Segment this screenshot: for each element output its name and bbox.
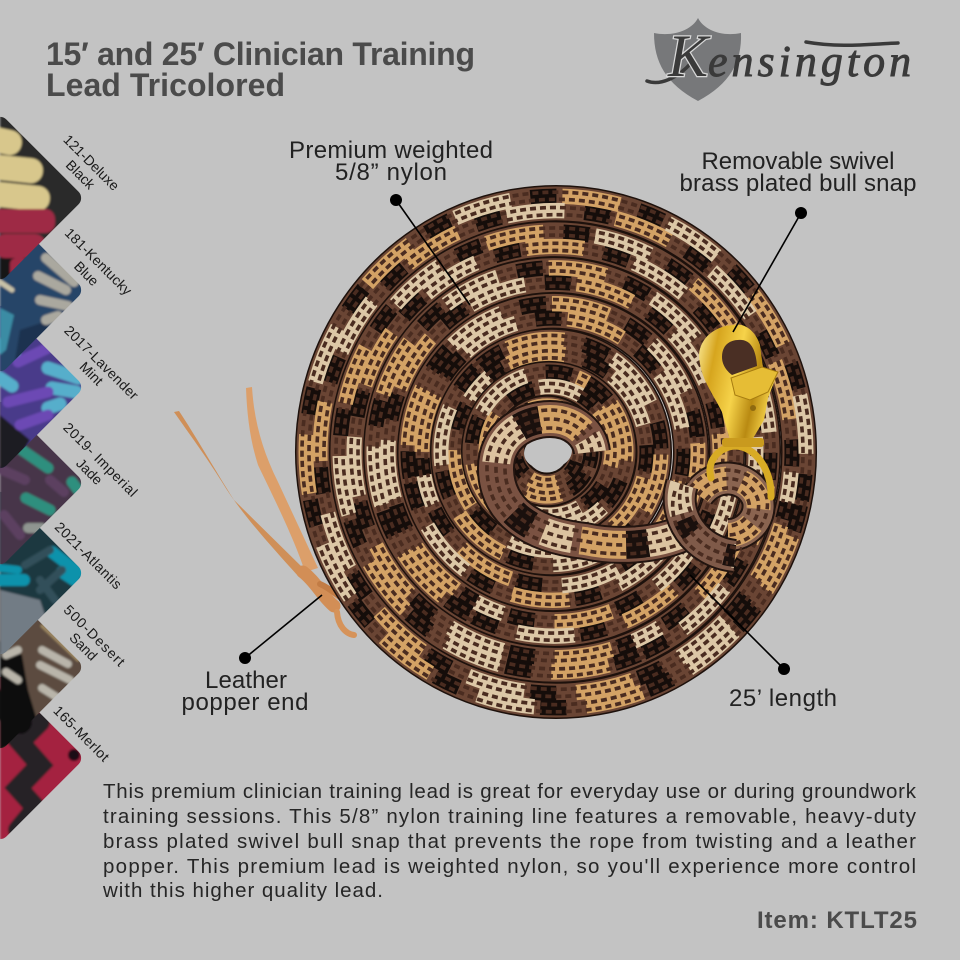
- icon: shield: [654, 18, 741, 101]
- swatch: 2021-Atlantis: [0, 492, 82, 654]
- callout: leather popper end: [182, 595, 322, 716]
- description paragraph: brass plated swivel bull snap that prevents the rope from twisting and a leather: [103, 830, 916, 853]
- swatch: 121-Deluxe Black: [0, 116, 82, 280]
- logo swooshes: [647, 42, 898, 82]
- leather popper: [174, 387, 366, 635]
- swatch labels: 181-Kentucky: [62, 225, 135, 298]
- item number: Item: KTLT25: [757, 907, 917, 934]
- brass bull snap: [699, 324, 778, 447]
- swatch labels: 165-Merlot: [50, 702, 113, 765]
- swatch labels: 500-Desert: [61, 602, 129, 669]
- description paragraph: popper. This premium lead is weighted nylon, so you'll experience more control: [103, 855, 916, 878]
- rope ring 2: [268, 158, 842, 746]
- callout: premium weighted nylon: 5/8” nylon: [335, 159, 447, 186]
- rope ring 1 (outer): [255, 144, 857, 760]
- snap body: [699, 324, 778, 440]
- swatch labels: Jade: [73, 455, 106, 488]
- swatch labels: 121-Deluxe: [60, 131, 123, 194]
- swatch labels: 2019- Imperial: [60, 419, 141, 500]
- snap collar: [722, 438, 764, 447]
- callout: premium weighted nylon: [289, 137, 493, 305]
- callout: leather popper end: Leather: [205, 667, 287, 694]
- description paragraph: training sessions. This 5/8” nylon training line features a removable, heavy-duty: [103, 805, 917, 828]
- rope ring 5: [390, 288, 712, 616]
- swatch labels: Blue: [71, 258, 102, 289]
- rope ring 3: [305, 197, 803, 707]
- swatch: 165-Merlot: [0, 676, 82, 840]
- snap eye opening: [722, 340, 757, 375]
- front rope loop: [487, 410, 694, 554]
- swatch labels: Sand: [66, 629, 101, 664]
- description paragraph: with this higher quality lead.: [102, 879, 383, 902]
- swatch labels: 2017-Lavender: [61, 322, 142, 403]
- rope ring 7 (inner): [483, 385, 611, 517]
- swatch: 181-Kentucky Blue: [0, 232, 82, 372]
- swivel ring of snap: [710, 446, 771, 497]
- callout: removable swivel snap: brass plated bull snap: [680, 170, 916, 197]
- rope coil: [255, 144, 857, 760]
- coil centre hole: [522, 432, 574, 472]
- logo: Kensington: [647, 18, 915, 101]
- logo wordmark: Kensington: [667, 23, 915, 89]
- callout: removable swivel snap: Removable swivel: [702, 148, 894, 175]
- title: Lead Tricolored: [46, 67, 285, 103]
- callout: leather popper end: popper end: [182, 689, 308, 716]
- swatch: 2019-Imperial Jade: [0, 402, 82, 564]
- callout: 25 foot length: 25’ length: [729, 685, 837, 712]
- swatch: 2017-Lavender Mint: [0, 306, 82, 468]
- swatch labels: Mint: [77, 358, 107, 389]
- swatch labels: Black: [63, 157, 99, 193]
- swatch labels: [50, 131, 142, 765]
- swatch: 500-Desert Sand: [0, 586, 82, 748]
- rope ring 4: [380, 275, 726, 629]
- description paragraph: [102, 780, 917, 902]
- rope ring 6: [438, 338, 660, 564]
- swatch labels: 2021-Atlantis: [52, 519, 125, 592]
- callout: premium weighted nylon: Premium weighted: [289, 137, 493, 164]
- callout: removable swivel snap: [680, 148, 916, 332]
- description paragraph: This premium clinician training lead is great for everyday use or during groundwork: [103, 780, 917, 803]
- callout: 25 foot length: [690, 575, 837, 712]
- rope knot: [673, 470, 767, 563]
- title: [46, 36, 475, 103]
- panel: colour swatches: [0, 116, 82, 840]
- snap gate: [731, 367, 778, 400]
- title: 15′ and 25′ Clinician Training: [46, 36, 475, 72]
